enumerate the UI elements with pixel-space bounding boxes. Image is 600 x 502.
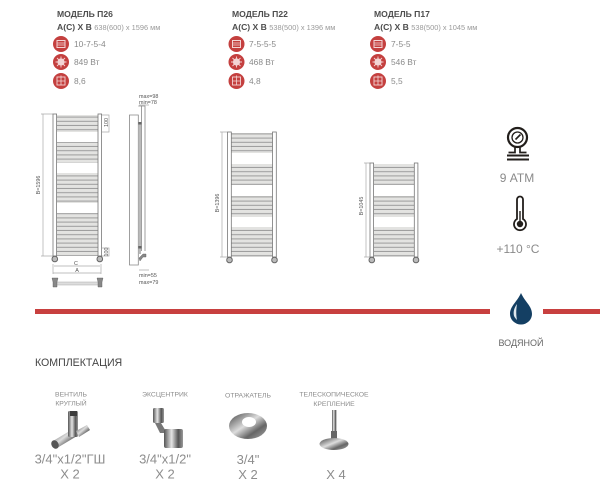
technical drawing: П17 front view: В=1045 <box>359 197 365 215</box>
technical drawing: П22 front view <box>215 132 277 263</box>
icon: thermometer <box>514 196 526 230</box>
icon: water drop <box>510 293 532 324</box>
item: round valve: 3/4"х1/2"ГШ <box>35 452 105 466</box>
spec block: model П17: 546 Вт <box>391 57 417 67</box>
spec block: model П17: 5,5 <box>391 76 403 86</box>
spec block: model П17: А(С) Х В 538(500) x 1045 мм <box>374 22 477 32</box>
spec block: model П22 <box>228 9 335 89</box>
spec block: model П26: 8,6 <box>74 76 86 86</box>
spec block: model П22: 468 Вт <box>249 57 275 67</box>
technical drawing: П17 front view <box>359 163 419 263</box>
spec block: model П17 <box>370 9 477 89</box>
item: telescopic mount <box>299 392 369 482</box>
label: pressure: 9 АТМ <box>500 171 534 185</box>
heading: package contents: КОМПЛЕКТАЦИЯ <box>35 357 122 369</box>
spec block: model П17: 7-5-5 <box>391 39 411 49</box>
item: eccentric: ЭКСЦЕНТРИК <box>142 392 188 398</box>
item: reflector: 3/4" <box>237 452 260 467</box>
spec block: model П26: 849 Вт <box>74 57 100 67</box>
item: round valve: КРУГЛЫЙ <box>55 398 87 408</box>
spec block: model П26: А(С) Х В 638(600) x 1596 мм <box>57 22 160 32</box>
item: eccentric: Х 2 <box>155 466 175 482</box>
item: eccentric <box>139 392 191 482</box>
technical drawing: П26 front view: 100 <box>104 248 110 256</box>
spec block: model П26 <box>53 9 160 89</box>
divider: left red line <box>35 309 490 314</box>
item: round valve: ВЕНТИЛЬ <box>55 392 88 398</box>
spec block: model П26: МОДЕЛЬ П26 <box>57 9 113 19</box>
item: telescopic mount: Х 4 <box>326 467 346 482</box>
technical drawing: П26 side view: max=79 <box>139 280 158 286</box>
label: temperature: +110 °C <box>497 242 540 256</box>
spec block: model П26: 10-7-5-4 <box>74 39 106 49</box>
spec block: model П17: МОДЕЛЬ П17 <box>374 9 430 19</box>
item: eccentric: 3/4"х1/2" <box>139 452 191 466</box>
item: telescopic mount: КРЕПЛЕНИЕ <box>313 401 355 408</box>
item: round valve: Х 2 <box>60 466 80 482</box>
spec block: model П22: МОДЕЛЬ П22 <box>232 9 288 19</box>
spec block: model П22: А(С) Х В 538(500) x 1396 мм <box>232 22 335 32</box>
technical drawing: П26 front view: В=1596 <box>36 176 42 194</box>
icon: pressure gauge <box>507 128 529 160</box>
item: round valve <box>35 392 105 482</box>
technical drawing: П26 side view <box>130 94 158 286</box>
technical drawing: П26 front view: А <box>75 268 79 274</box>
item: reflector: ОТРАЖАТЕЛЬ <box>225 392 272 400</box>
technical drawing: П26 front view: 100 <box>104 118 110 127</box>
item: reflector <box>225 392 272 482</box>
technical drawing: П26 front view: С <box>74 261 78 267</box>
divider: right red line <box>543 309 600 314</box>
technical drawing: П26 side view: max=98 <box>139 94 158 100</box>
technical drawing: П26 side view: min=55 <box>139 273 157 279</box>
label: water heating type: ВОДЯНОЙ <box>498 337 544 348</box>
technical drawing: П26 side view: min=78 <box>139 100 157 106</box>
spec block: model П22: 7-5-5-5 <box>249 39 276 49</box>
technical drawing: П22 front view: В=1396 <box>215 194 221 212</box>
item: reflector: Х 2 <box>238 467 258 482</box>
item: telescopic mount: ТЕЛЕСКОПИЧЕСКОЕ <box>299 392 369 398</box>
spec block: model П22: 4,8 <box>249 76 261 86</box>
technical drawing: П26 front view <box>36 114 110 287</box>
